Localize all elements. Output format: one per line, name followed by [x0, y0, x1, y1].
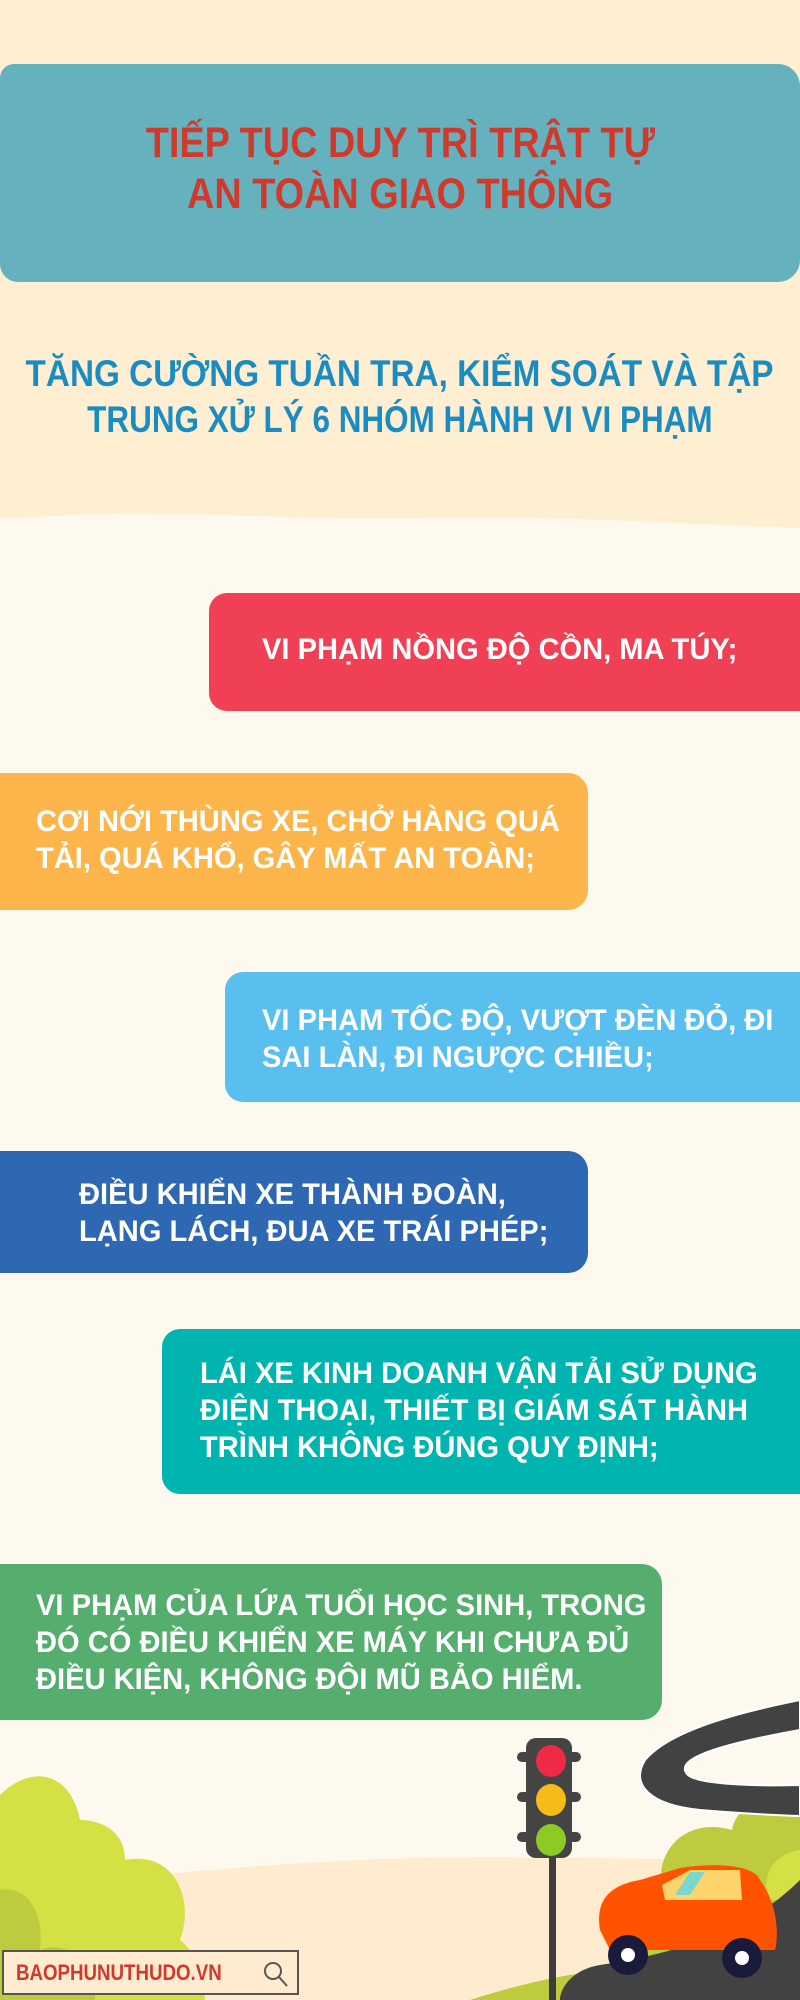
illustration: bushes, road, traffic light, car [0, 1699, 800, 2000]
title: AN TOÀN GIAO THÔNG [187, 170, 613, 218]
panel: violation 4 [0, 1151, 588, 1273]
panel: violation 3: SAI LÀN, ĐI NGƯỢC CHIỀU; [262, 1041, 654, 1074]
subtitle: TĂNG CƯỜNG TUẦN TRA, KIỂM SOÁT VÀ TẬP [26, 353, 774, 394]
panel: violation 3 [225, 972, 800, 1102]
panel: violation 5 [162, 1329, 800, 1494]
logo box [2, 1950, 299, 1995]
subtitle [26, 352, 774, 440]
title [145, 118, 655, 218]
panel: violation 6: VI PHẠM CỦA LỨA TUỔI HỌC SINH, TRONG [36, 1589, 646, 1622]
panel: violation 2: TẢI, QUÁ KHỔ, GÂY MẤT AN TOÀN; [36, 842, 535, 875]
panel: violation 6 [0, 1564, 662, 1720]
icon: magnifier [264, 1962, 288, 1987]
panel: violation 5: TRÌNH KHÔNG ĐÚNG QUY ĐỊNH; [200, 1431, 659, 1464]
logo box: BAOPHUNUTHUDO.VN [16, 1960, 222, 1985]
panel: violation 6: ĐÓ CÓ ĐIỀU KHIỂN XE MÁY KHI CHƯA ĐỦ [36, 1626, 629, 1659]
road [560, 1700, 800, 2000]
panel: violation 6: ĐIỀU KIỆN, KHÔNG ĐỘI MŨ BẢO HIỂM. [36, 1663, 582, 1696]
panel: violation 2 [0, 773, 588, 910]
title panel [0, 64, 800, 282]
panel: violation 2: CƠI NỚI THÙNG XE, CHỞ HÀNG QUÁ [36, 805, 560, 838]
bushes right [470, 1790, 800, 2000]
panel: violation 1 [209, 593, 800, 711]
traffic light [517, 1738, 581, 2000]
panel: violation 5: ĐIỆN THOẠI, THIẾT BỊ GIÁM SÁT HÀNH [200, 1394, 748, 1427]
title: TIẾP TỤC DUY TRÌ TRẬT TỰ [145, 119, 655, 167]
subtitle: TRUNG XỬ LÝ 6 NHÓM HÀNH VI VI PHẠM [87, 399, 713, 440]
panel: violation 4: ĐIỀU KHIỂN XE THÀNH ĐOÀN, [79, 1178, 506, 1211]
bushes left [0, 1776, 205, 2000]
panel: violation 5: LÁI XE KINH DOANH VẬN TẢI SỬ DỤNG [200, 1357, 758, 1390]
panel: violation 3: VI PHẠM TỐC ĐỘ, VƯỢT ĐÈN ĐỎ, ĐI [262, 1004, 773, 1037]
car [599, 1865, 777, 1978]
panel: violation 1: VI PHẠM NỒNG ĐỘ CỒN, MA TÚY; [262, 633, 737, 666]
panel: violation 4: LẠNG LÁCH, ĐUA XE TRÁI PHÉP; [79, 1215, 548, 1248]
